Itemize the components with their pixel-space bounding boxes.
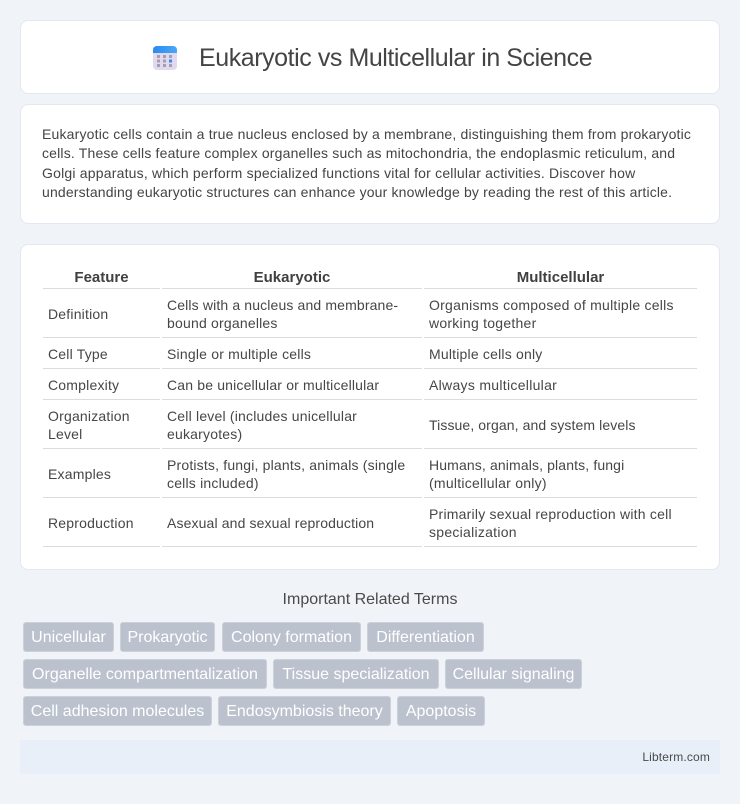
row: organization level xyxy=(48,408,636,442)
column headers: Eukaryotic xyxy=(254,269,330,286)
intro text xyxy=(42,126,691,200)
tag row 2: Cellular signaling xyxy=(453,666,574,683)
column headers: Multicellular xyxy=(517,269,604,286)
row: definition: bound organelles xyxy=(167,315,278,331)
row: reproduction: Asexual and sexual reproduction xyxy=(167,515,374,531)
intro text: understanding eukaryotic structures can enhance your knowledge by reading the rest of this article. xyxy=(42,184,672,200)
tag row 1: Differentiation xyxy=(376,629,475,646)
related terms heading: Important Related Terms xyxy=(283,591,457,608)
related terms tags xyxy=(23,622,582,726)
tag row 3 xyxy=(23,696,485,726)
row: reproduction: Reproduction xyxy=(48,515,134,531)
tag row 2 xyxy=(23,659,582,689)
table card xyxy=(20,244,720,570)
row: organization level: eukaryotes) xyxy=(167,426,242,442)
tag row 1: Prokaryotic xyxy=(127,629,208,646)
tag row 1 xyxy=(23,622,484,652)
row: complexity: Complexity xyxy=(48,377,119,393)
row: examples: cells included) xyxy=(167,475,259,491)
row: definition: working together xyxy=(429,315,537,331)
row: reproduction xyxy=(48,506,672,540)
tag row 3: Apoptosis xyxy=(406,703,476,720)
row: reproduction: Primarily sexual reproduction with cell xyxy=(429,506,672,522)
row: reproduction: specialization xyxy=(429,524,517,540)
row: complexity: Always multicellular xyxy=(429,377,557,393)
row: definition: Definition xyxy=(48,306,108,322)
column headers xyxy=(74,269,604,286)
row: organization level: Level xyxy=(48,426,82,442)
intro text: cells. These cells feature complex organelles such as mitochondria, the endoplasmic reticulum, and xyxy=(42,145,675,161)
footer bar xyxy=(20,740,720,774)
tag row 3: Endosymbiosis theory xyxy=(226,703,383,720)
row: examples: (multicellular only) xyxy=(429,475,547,491)
tag row 2: Tissue specialization xyxy=(282,666,430,683)
row: cell type: Single or multiple cells xyxy=(167,346,311,362)
row: organization level: Cell level (includes unicellular xyxy=(167,408,357,424)
row: examples xyxy=(48,457,624,491)
row: definition: Cells with a nucleus and membrane- xyxy=(167,297,398,313)
row: organization level: Organization xyxy=(48,408,130,424)
row: examples: Humans, animals, plants, fungi xyxy=(429,457,624,473)
title: Eukaryotic vs Multicellular in Science xyxy=(199,44,592,72)
row: examples: Protists, fungi, plants, animals (single xyxy=(167,457,405,473)
comparison table xyxy=(43,269,697,547)
row: organization level: Tissue, organ, and system levels xyxy=(429,417,636,433)
intro text: Golgi apparatus, which perform specialized functions vital for cellular activities. Discover how xyxy=(42,165,635,181)
intro text: Eukaryotic cells contain a true nucleus enclosed by a membrane, distinguishing them from prokaryotic xyxy=(42,126,691,142)
footer source: Libterm.com xyxy=(642,750,710,764)
column headers: Feature xyxy=(74,269,129,286)
row: definition xyxy=(48,297,674,331)
header card xyxy=(20,20,720,94)
row: complexity xyxy=(48,377,557,393)
row: definition: Organisms composed of multiple cells xyxy=(429,297,674,313)
tag row 1: Colony formation xyxy=(231,629,352,646)
icon: calendar xyxy=(153,46,177,70)
row: cell type: Multiple cells only xyxy=(429,346,543,362)
row: cell type xyxy=(48,346,543,362)
row: complexity: Can be unicellular or multicellular xyxy=(167,377,379,393)
tag row 1: Unicellular xyxy=(31,629,106,646)
tag row 3: Cell adhesion molecules xyxy=(31,703,204,720)
row: cell type: Cell Type xyxy=(48,346,108,362)
row: examples: Examples xyxy=(48,466,111,482)
tag row 2: Organelle compartmentalization xyxy=(32,666,258,683)
intro card xyxy=(20,104,720,224)
